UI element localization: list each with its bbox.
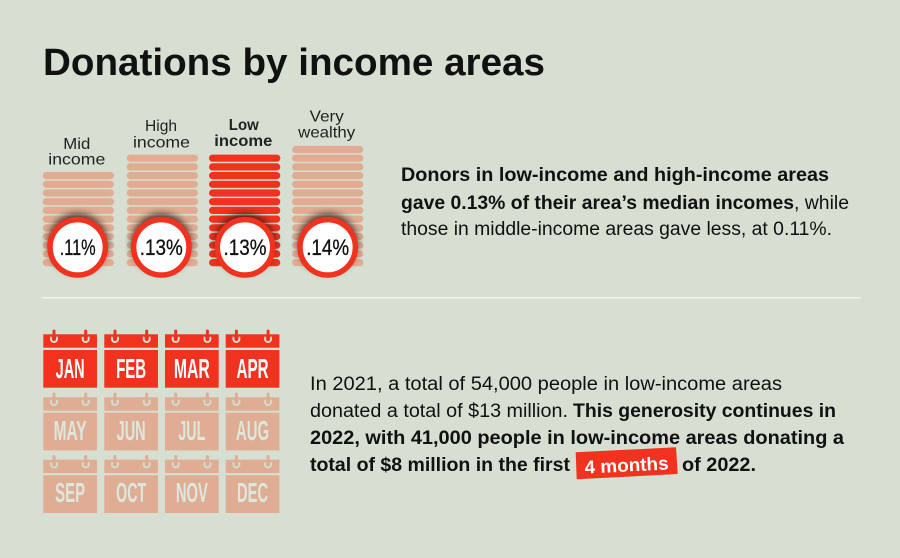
calendar: AUG <box>226 392 279 450</box>
text block: income area findings <box>401 165 849 240</box>
callout: 4 months: 4 months <box>584 452 669 478</box>
text block: 2021 and 2022 donations <box>310 374 844 476</box>
text block: 2021 and 2022 donations: This generosity continues in <box>573 401 836 422</box>
badge: .11%: .11% <box>60 235 96 260</box>
calendar: NOV <box>165 455 219 513</box>
calendar: JUN <box>104 392 158 450</box>
calendar: APR <box>226 330 279 388</box>
text block: 2021 and 2022 donations: of 2022. <box>682 455 756 476</box>
label: high income <box>133 118 190 151</box>
calendar: JUL: JUL <box>178 415 205 446</box>
label: mid income: income <box>48 152 105 168</box>
text block: 2021 and 2022 donations: 2022, with 41,000 people in low-income areas donating a <box>310 428 844 449</box>
text block: income area findings: Donors in low-income and high-income areas <box>401 165 829 186</box>
calendar: SEP <box>43 455 97 513</box>
badge: .13% <box>134 220 189 275</box>
text block: 2021 and 2022 donations: donated a total of $13 million. <box>310 401 568 422</box>
calendar: FEB: FEB <box>116 353 146 384</box>
calendar: APR: APR <box>237 353 269 384</box>
calendar: MAY <box>43 392 97 450</box>
badge: .13%: .13% <box>140 235 183 260</box>
calendar: AUG: AUG <box>236 415 269 446</box>
label: low income: Low <box>229 117 259 134</box>
label: high income: income <box>133 134 190 151</box>
bar column: high income <box>127 118 198 275</box>
calendar: NOV: NOV <box>176 477 208 508</box>
label: low income: income <box>214 133 272 150</box>
calendar: MAY: MAY <box>54 415 87 446</box>
bar column: mid income <box>43 136 114 275</box>
calendar: SEP: SEP <box>55 477 85 508</box>
title: Donations by income areas <box>43 42 545 84</box>
badge: .13% <box>217 220 273 275</box>
calendar: OCT: OCT <box>116 477 146 508</box>
calendar: OCT <box>104 455 158 513</box>
text block: 2021 and 2022 donations: In 2021, a total of 54,000 people in low-income areas <box>310 374 782 395</box>
calendar grid <box>43 330 279 513</box>
text block: income area findings: gave 0.13% of their area’s median incomes <box>401 193 794 214</box>
calendar: FEB <box>104 330 158 388</box>
label: mid income <box>48 136 105 168</box>
text block: income area findings: those in middle-income areas gave less, at 0.11%. <box>401 219 832 240</box>
calendar: JUL <box>165 392 219 450</box>
label: mid income: Mid <box>63 136 90 153</box>
badge: .14%: .14% <box>306 235 349 260</box>
calendar: JAN: JAN <box>56 353 85 384</box>
label: very wealthy: Very <box>310 108 344 125</box>
label: very wealthy <box>297 108 355 141</box>
calendar: JUN: JUN <box>117 415 146 446</box>
text block: 2021 and 2022 donations: total of $8 million in the first <box>310 455 571 476</box>
calendar: MAR <box>165 330 219 388</box>
text block: income area findings: , while <box>794 193 849 214</box>
calendar: JAN <box>43 330 97 388</box>
label: low income <box>214 117 272 150</box>
calendar: DEC: DEC <box>237 477 268 508</box>
bar column: low income (highlighted) <box>209 117 280 275</box>
callout: 4 months <box>576 447 678 479</box>
calendar: DEC <box>226 455 279 513</box>
badge: .14% <box>300 220 355 275</box>
badge: .13%: .13% <box>224 235 266 260</box>
label: high income: High <box>145 118 177 135</box>
bar column: very wealthy <box>292 108 363 275</box>
calendar: MAR: MAR <box>174 353 210 384</box>
label: very wealthy: wealthy <box>297 124 355 141</box>
